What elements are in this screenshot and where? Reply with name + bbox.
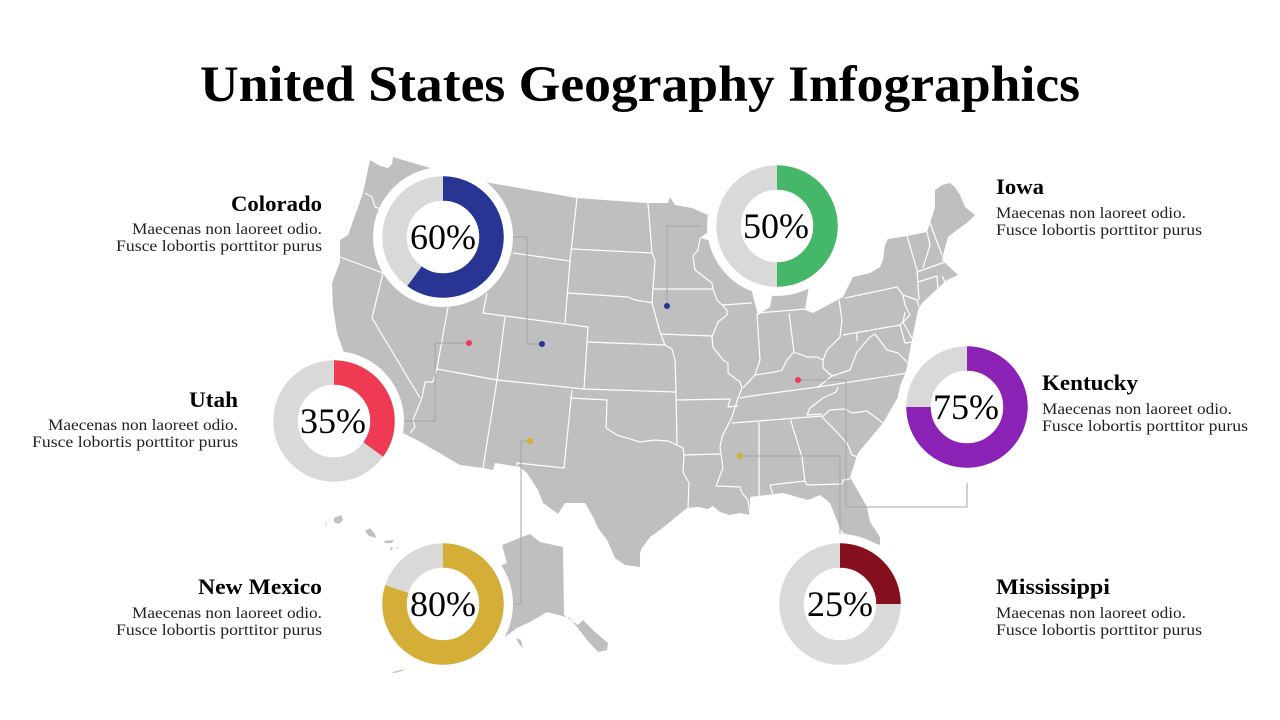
text block: Kentucky: Kentucky — [1042, 370, 1138, 395]
donut: Mississippi 25%: 25% — [807, 584, 873, 624]
location dot: Mississippi — [737, 453, 743, 459]
text block: Kentucky — [1042, 370, 1248, 435]
connector: Iowa — [667, 226, 701, 306]
connector: Utah — [404, 343, 469, 421]
text block: New Mexico: New Mexico — [198, 574, 322, 599]
text block: Iowa: Fusce lobortis porttitor purus — [996, 222, 1202, 239]
location dot: New Mexico — [527, 438, 533, 444]
text block: Utah: Utah — [189, 387, 238, 412]
title: United States Geography Infographics — [200, 57, 1080, 113]
donut: Iowa 50%: 50% — [743, 206, 809, 246]
Hawaii — [325, 515, 400, 551]
text block: Utah — [32, 387, 238, 451]
state borders — [340, 193, 945, 515]
Alaska — [480, 534, 608, 652]
donut: Utah 35% — [264, 351, 404, 491]
donut: New Mexico 80%: 80% — [410, 584, 476, 624]
text block: Iowa: Maecenas non laoreet odio. — [996, 205, 1186, 222]
connector: New Mexico — [513, 441, 530, 604]
text block: Colorado: Fusce lobortis porttitor purus — [116, 238, 322, 255]
text block: Utah: Maecenas non laoreet odio. — [48, 417, 238, 434]
donut: Colorado 60%: 60% — [410, 217, 476, 257]
text block: Colorado: Colorado — [231, 191, 322, 216]
location dot: Utah — [466, 340, 472, 346]
map of the United States — [325, 157, 975, 673]
text block: Mississippi — [996, 574, 1202, 639]
location dot: Kentucky — [795, 377, 801, 383]
text block: Kentucky: Fusce lobortis porttitor purus — [1042, 418, 1248, 435]
text block: Mississippi: Maecenas non laoreet odio. — [996, 605, 1186, 622]
text block: Mississippi: Fusce lobortis porttitor purus — [996, 622, 1202, 639]
connector: Mississippi — [740, 456, 840, 535]
text block: New Mexico — [116, 574, 322, 639]
donut: Colorado 60% — [373, 167, 513, 307]
contiguous states — [332, 157, 975, 567]
text block: Mississippi: Mississippi — [996, 574, 1110, 599]
text block: Colorado: Maecenas non laoreet odio. — [132, 221, 322, 238]
text block: Colorado — [116, 191, 322, 255]
connector: Kentucky — [798, 380, 967, 507]
text block: Kentucky: Maecenas non laoreet odio. — [1042, 401, 1232, 418]
donut: Kentucky 75%: 75% — [933, 387, 999, 427]
donut: New Mexico 80% — [373, 534, 513, 674]
Alaska peninsula and islands — [392, 638, 523, 673]
location dot: Colorado — [539, 341, 545, 347]
text block: Iowa: Iowa — [996, 174, 1044, 199]
connector: Colorado — [513, 237, 540, 344]
donut: Mississippi 25% — [770, 534, 910, 674]
donut: Kentucky 75% — [897, 337, 1037, 477]
text block: New Mexico: Maecenas non laoreet odio. — [132, 605, 322, 622]
donut: Iowa 50% — [707, 156, 847, 296]
location dot: Iowa — [664, 303, 670, 309]
text block: Iowa — [996, 174, 1202, 239]
donut: Utah 35%: 35% — [300, 401, 366, 441]
text block: New Mexico: Fusce lobortis porttitor purus — [116, 622, 322, 639]
text block: Utah: Fusce lobortis porttitor purus — [32, 434, 238, 451]
